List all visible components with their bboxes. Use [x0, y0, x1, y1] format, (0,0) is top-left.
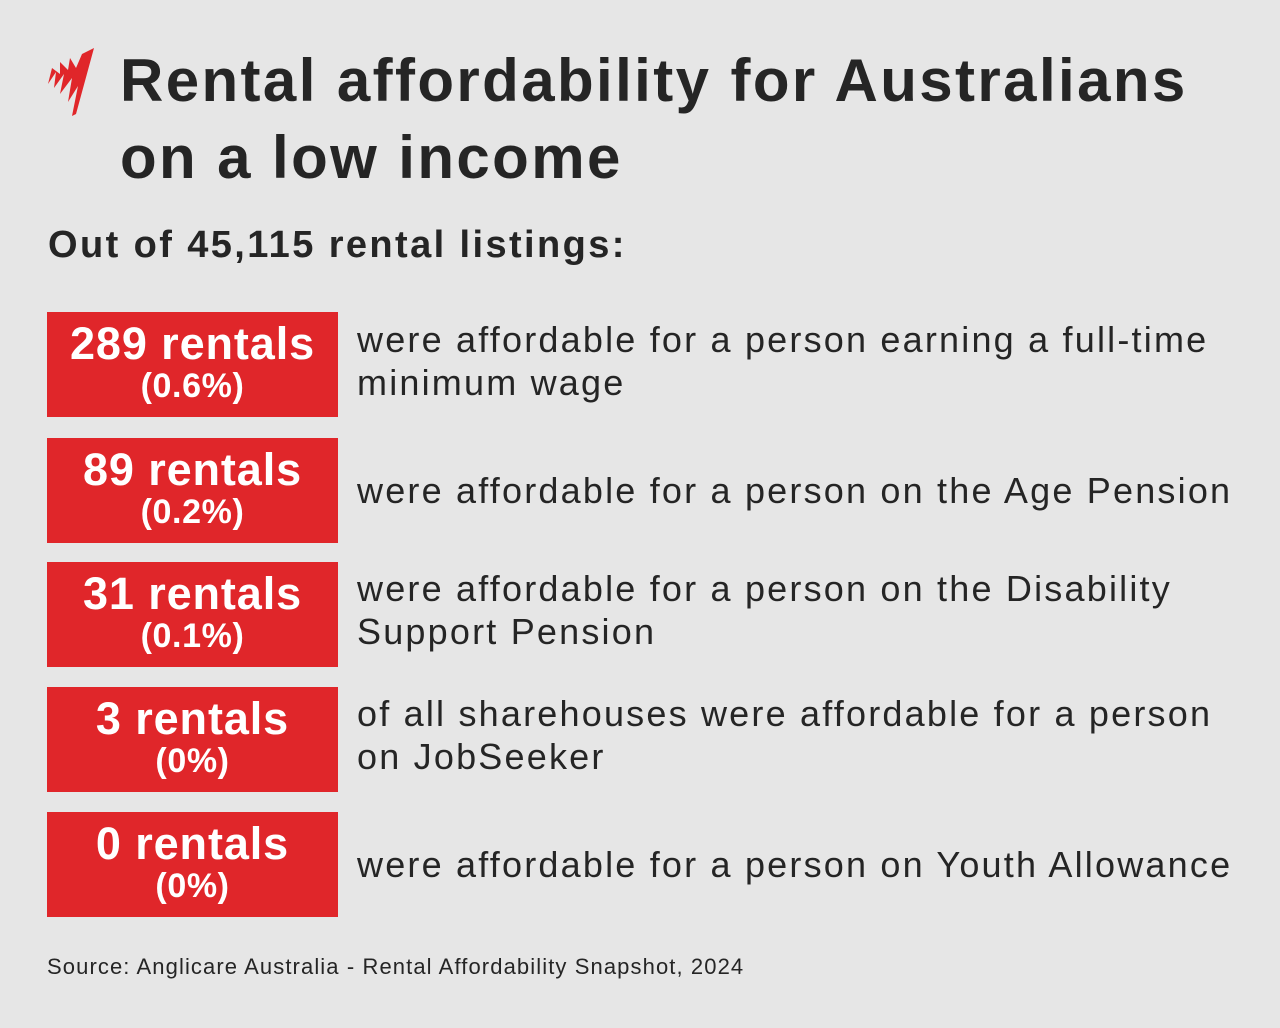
row 2 box: 89 rentals: [83, 444, 302, 495]
row 4 text: of all sharehouses were affordable for a person: [357, 693, 1212, 734]
row 1 text: minimum wage: [357, 362, 625, 403]
row 4 box: 3 rentals: [96, 693, 289, 744]
row 5 box: (0%): [155, 867, 230, 905]
row 3 text: [357, 568, 1172, 652]
row 5 box: 0 rentals: [96, 818, 289, 869]
row 3 text: Support Pension: [357, 611, 656, 652]
row 5 box: [47, 812, 338, 917]
row 2 box: [47, 438, 338, 543]
title: Rental affordability for Australians: [120, 47, 1188, 114]
title: [120, 47, 1188, 191]
subtitle: Out of 45,115 rental listings:: [48, 224, 627, 266]
row 1 text: were affordable for a person earning a full-time: [357, 319, 1208, 360]
row 3 box: 31 rentals: [83, 568, 302, 619]
row 1 box: 289 rentals: [70, 318, 315, 369]
row 1 box: (0.6%): [141, 367, 244, 405]
row 4 text: [357, 693, 1212, 777]
source: Source: Anglicare Australia - Rental Affordability Snapshot, 2024: [47, 954, 744, 979]
row 3 box: (0.1%): [141, 617, 244, 655]
row 2 text: were affordable for a person on the Age Pension: [357, 470, 1232, 511]
row 3 text: were affordable for a person on the Disability: [357, 568, 1172, 609]
row 1 box: [47, 312, 338, 417]
row 4 box: (0%): [155, 742, 230, 780]
row 4 box: [47, 687, 338, 792]
icon: logo: [48, 48, 94, 116]
row 1 text: [357, 319, 1208, 403]
row 2 box: (0.2%): [141, 493, 244, 531]
title: on a low income: [120, 124, 623, 191]
row 3 box: [47, 562, 338, 667]
row 4 text: on JobSeeker: [357, 736, 606, 777]
row 5 text: were affordable for a person on Youth Allowance: [357, 844, 1232, 885]
